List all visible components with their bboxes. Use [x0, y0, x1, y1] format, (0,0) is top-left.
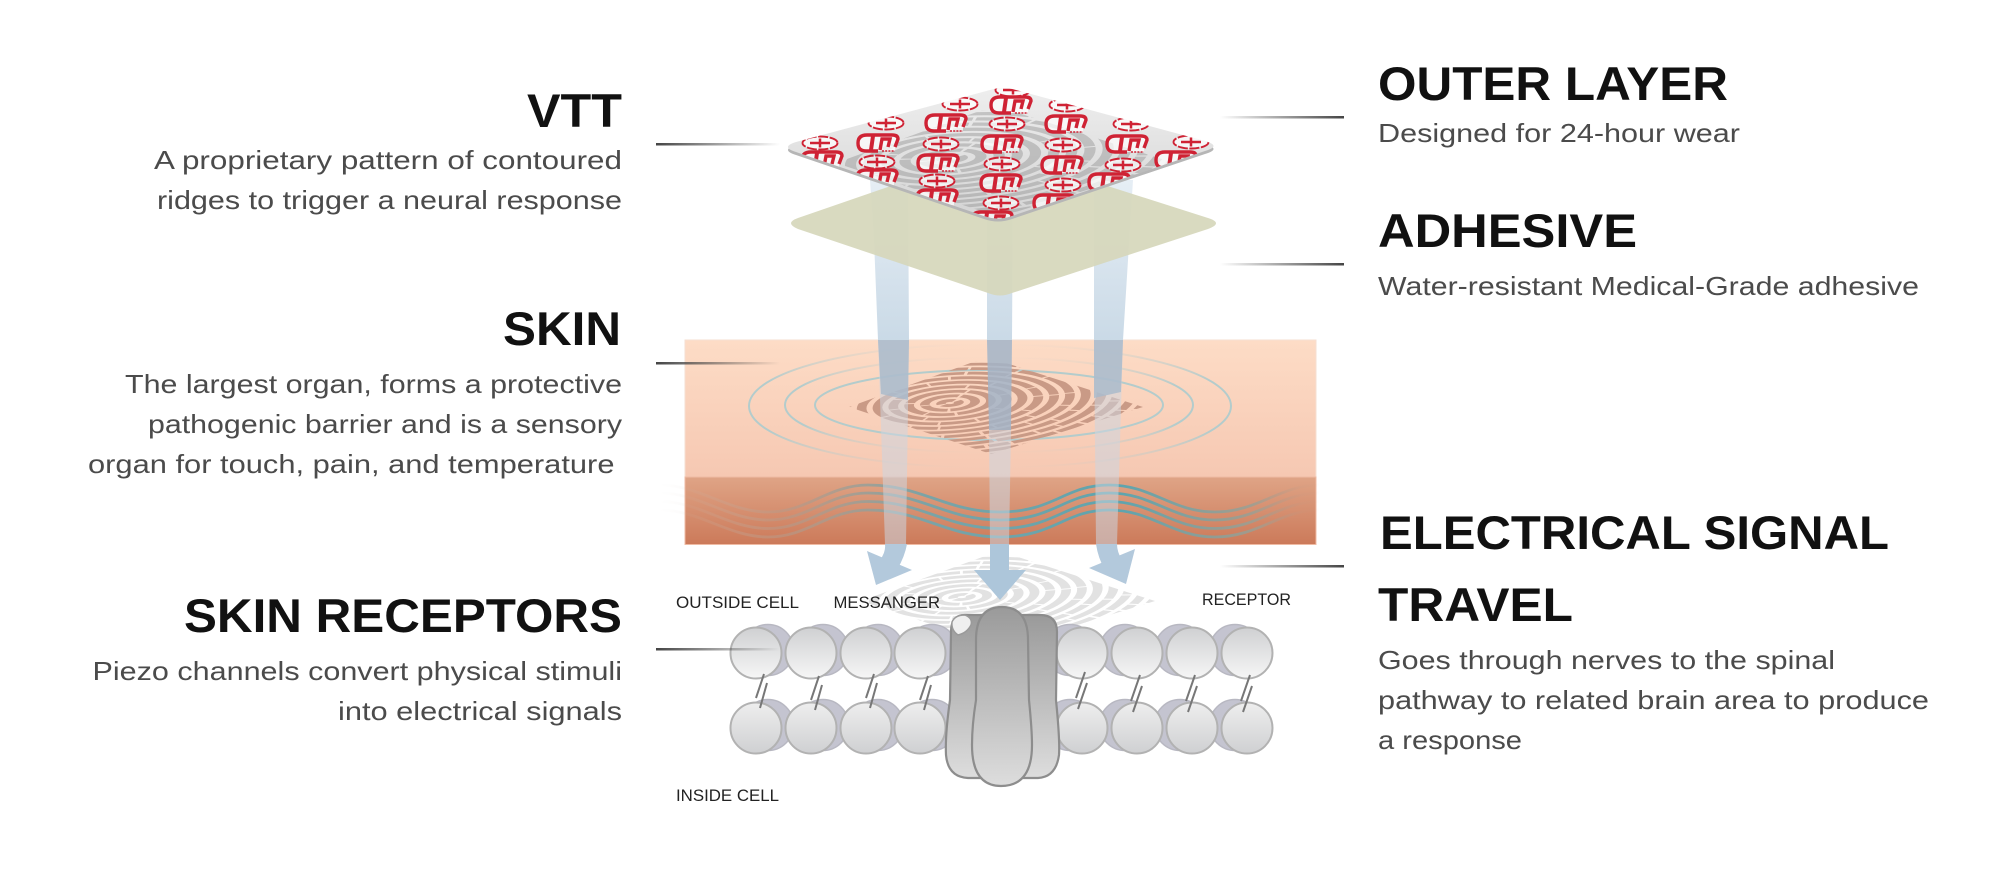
description: skin — [88, 369, 622, 479]
leader line: adhesive — [1220, 263, 1344, 266]
heading: skin receptors: SKIN RECEPTORS — [184, 589, 622, 642]
description: outer layer: Designed for 24-hour wear — [1378, 118, 1740, 148]
description: skin: The largest organ, forms a protective — [125, 369, 622, 399]
leader line: skin — [656, 362, 780, 364]
leader line: VTT — [656, 143, 780, 146]
patch ridge and logo pattern — [802, 88, 1210, 218]
description: VTT: A proprietary pattern of contoured — [154, 145, 622, 175]
patch rim — [788, 91, 1214, 222]
description: VTT: ridges to trigger a neural response — [157, 185, 622, 215]
description: VTT — [154, 145, 622, 215]
text block: outer layer — [1378, 57, 1740, 148]
heading: adhesive: ADHESIVE — [1378, 204, 1637, 257]
diagram label: outside cell: OUTSIDE CELL — [676, 593, 799, 612]
diagram label: inside cell: INSIDE CELL — [676, 786, 779, 805]
heading: electrical signal travel: ELECTRICAL SIGNAL — [1380, 506, 1889, 559]
description: adhesive: Water-resistant Medical-Grade adhesive — [1378, 271, 1919, 301]
description: electrical signal travel: pathway to related brain area to produce — [1378, 685, 1929, 715]
faint fingerprint above receptors — [759, 528, 1165, 666]
skin upper layer — [685, 340, 1316, 477]
description: skin: organ for touch, pain, and temperature — [88, 449, 614, 479]
membrane upper row, right — [1044, 624, 1272, 678]
blue signal column: centre — [974, 180, 1026, 600]
heading: VTT: VTT — [527, 84, 622, 137]
leader line: electrical signal — [1220, 565, 1344, 568]
heading: electrical signal travel — [1378, 506, 1889, 631]
diagram label: receptor: RECEPTOR — [1202, 590, 1291, 609]
panel: skin layer — [660, 334, 1320, 544]
heading: electrical signal travel: TRAVEL — [1378, 578, 1573, 631]
leader line: outer layer — [1220, 116, 1344, 118]
description: skin: pathogenic barrier and is a sensory — [148, 409, 622, 439]
description: electrical signal travel — [1378, 645, 1929, 755]
text block: skin — [88, 302, 622, 479]
heading: outer layer: OUTER LAYER — [1378, 57, 1728, 110]
skin fingerprint — [747, 334, 1153, 472]
panel: cell membrane — [730, 607, 1272, 786]
description: electrical signal travel: Goes through nerves to the spinal — [1378, 645, 1835, 675]
description: electrical signal travel: a response — [1378, 725, 1522, 755]
piezo channel protein — [946, 607, 1059, 786]
description: skin receptors — [92, 656, 622, 726]
ripple rings — [749, 344, 1231, 468]
text block: adhesive — [1378, 204, 1919, 301]
blue signal column: left — [867, 180, 912, 585]
text block: VTT — [154, 84, 622, 215]
skin lower layer — [685, 477, 1316, 544]
description: skin receptors: Piezo channels convert physical stimuli — [92, 656, 622, 686]
membrane lower row, right — [1044, 700, 1272, 754]
blue signal column: right — [1089, 180, 1135, 584]
description: skin receptors: into electrical signals — [338, 696, 622, 726]
patch surface — [788, 88, 1214, 218]
nerve waves — [660, 485, 1320, 537]
lipid tails — [756, 672, 1252, 712]
leader line: skin receptors — [656, 648, 780, 650]
membrane upper row, left — [730, 624, 958, 678]
text block: skin receptors — [92, 589, 622, 726]
messenger molecule — [952, 615, 971, 635]
membrane lower row, left — [730, 700, 958, 754]
panel: VTT outer patch — [788, 88, 1214, 222]
adhesive layer — [791, 150, 1216, 296]
heading: skin: SKIN — [503, 302, 621, 355]
text block: electrical signal travel — [1378, 506, 1929, 755]
diagram label: messanger: MESSANGER — [834, 593, 940, 612]
